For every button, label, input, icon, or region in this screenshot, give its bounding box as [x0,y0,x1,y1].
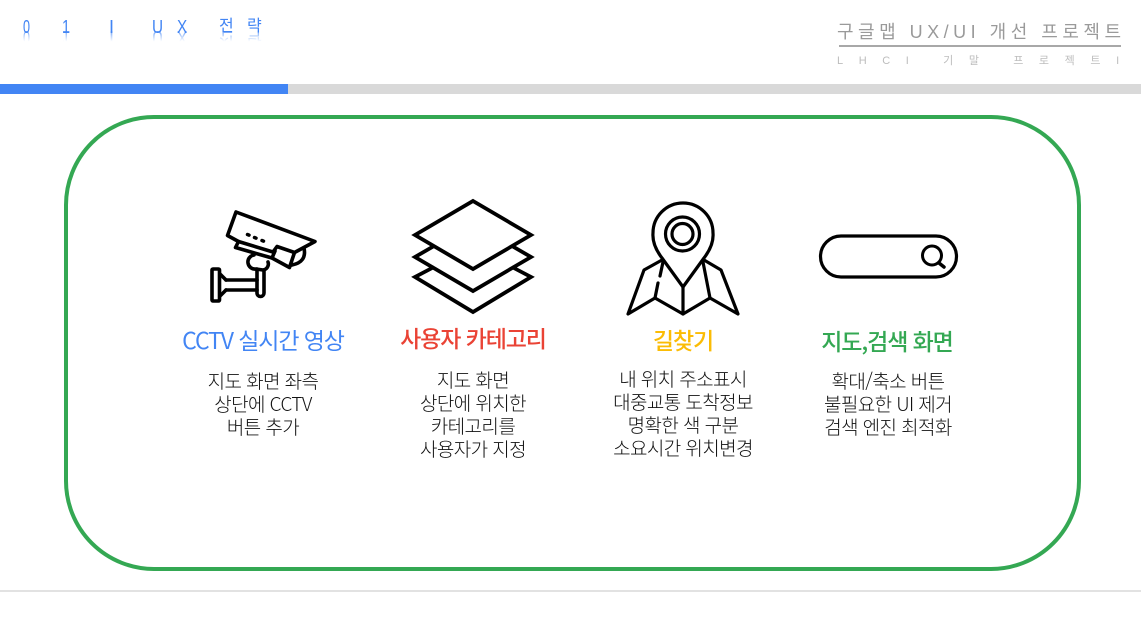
text: CCTV description: 버튼 추가 [227,413,299,440]
text: category description: 사용자가 지정 [420,435,526,462]
text: CCTV description [208,367,318,440]
icon: search bar [818,234,958,279]
footer line [0,590,1141,592]
text: map and search description: 불필요한 UI 제거 [824,390,952,417]
section title [23,17,262,41]
text: directions description: 대중교통 도착정보 [613,388,753,415]
section title: X [177,17,187,37]
text: directions description: 소요시간 위치변경 [613,434,753,461]
text: directions description: 내 위치 주소표시 [619,365,747,392]
text: map and search description [824,367,952,440]
text: category description: 지도 화면 [437,366,509,393]
text: map and search description: 검색 엔진 최적화 [824,413,952,440]
text: CCTV description: 지도 화면 좌측 [208,367,318,394]
text: map and search description: 확대/축소 버튼 [832,367,944,394]
icon: map pin [626,201,740,316]
text: category description: 상단에 위치한 [420,389,526,416]
text: category description: 카테고리를 [431,412,515,439]
heading: CCTV: CCTV 실시간 영상 [182,322,344,356]
section title: 략 [247,18,262,35]
text: directions description [613,365,753,461]
heading: map and search: 지도,검색 화면 [821,323,953,357]
text: directions description: 명확한 색 구분 [628,411,738,438]
heading: directions: 길찾기 [653,322,713,356]
section title: I [109,17,114,37]
section title: 전 [219,18,234,35]
heading: category: 사용자 카테고리 [400,320,546,354]
text: category description [420,366,526,462]
panel: features [64,115,1081,571]
icon: layers [411,198,535,314]
section title: 1 [62,17,70,37]
progress bar [0,84,1141,94]
section title: U [152,17,163,37]
section title: 0 [23,17,30,37]
icon: cctv camera [210,210,317,303]
project subtitle: LHCI 기말 프로젝트I [837,55,1135,67]
text: CCTV description: 상단에 CCTV [214,390,312,417]
project title: 구글맵 UX/UI 개선 프로젝트 [837,22,1126,42]
